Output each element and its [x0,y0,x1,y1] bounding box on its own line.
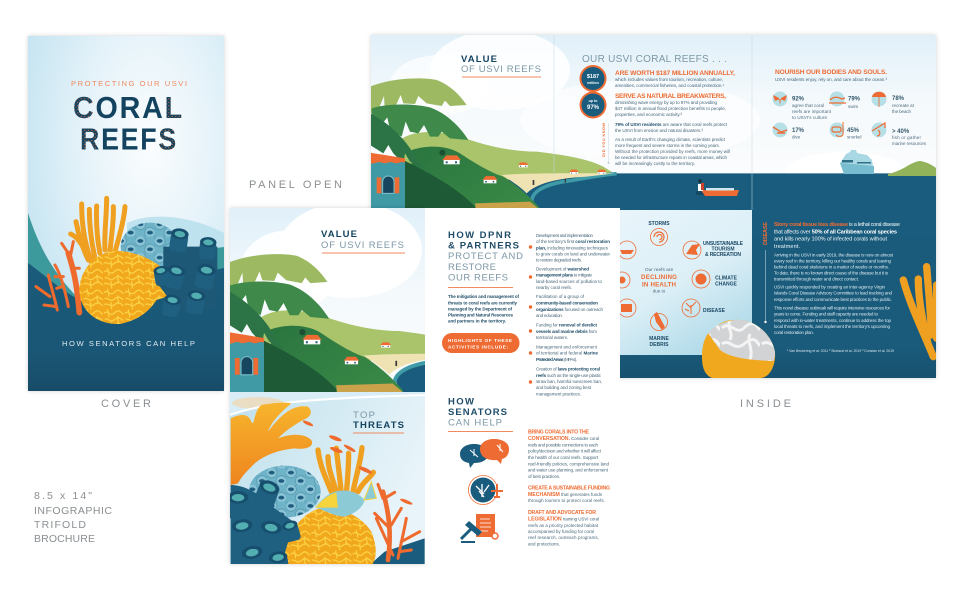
heading: top threats: THREATS [353,420,404,431]
text block: reef value facts: $47 million in annual flood protection benefits to people, [615,106,726,111]
stat: 45% snorkel [830,122,862,140]
center label: declining in health: due to [653,288,666,294]
label: panel open: PANEL OPEN [249,179,342,191]
text block: senator actions: CREATE A SUSTAINABLE FUNDING [528,486,610,492]
stat: 40% fish or gather: marine resources [892,141,927,146]
footnotes: ¹ Van Beukering et al. 2011 ² Storlazzi et al. 2019 ³ Constan et al. 2019 [787,349,894,353]
bullet list: protection activities: vessels and marine debris from [536,329,597,334]
text block: stony coral tissue loss disease: USVI quickly responded by creating an inter-agency Virgin [774,284,885,290]
text block: stony coral tissue loss disease: To date, there is no known direct cause of the disease but it is [774,270,889,276]
text: how senators can help: HOW SENATORS CAN HELP [62,339,195,348]
center label: declining in health [641,267,677,294]
stat: 78% beach [872,92,915,114]
text block: stony coral tissue loss disease: coral restoration plan. [774,330,814,335]
bullet list: protection activities: straw ban, harmful sunscreen ban, [536,379,602,384]
stat: 78% beach: 78% [892,96,905,102]
heading: how senators can help: HOW [448,396,474,408]
stat: 17% dive: 17% [792,128,805,134]
text block: reef value facts: be needed for infrastructure repairs in coastal areas, which [615,155,727,160]
illustration: cruise ship [840,150,874,174]
text block: reef value facts: will be increasingly costly to the territory. [615,161,695,166]
bullet list: protection activities: Management and enforcement [536,344,598,350]
text block: mitigation intro [448,294,520,324]
label: cover: COVER [101,398,151,410]
panel: top threats [228,392,425,578]
text block: senator actions: BRING CORALS INTO THE [528,430,590,436]
threat: unsustainable tourism and recreation: & RECREATION [705,252,741,258]
stat: 79% swim: 79% [848,96,861,102]
threat: climate change [692,270,738,288]
text block: stony coral tissue loss disease: local threats to reefs, and implement the territory's upcoming [774,324,890,329]
text block: stony coral tissue loss disease: Arriving in the USVI in early 2019, the disease is now on almost [774,252,894,258]
text block: mitigation intro: and partners in the territory. [448,318,506,324]
text block: senator actions: MECHANISM that generates funds [528,492,603,498]
text block: stony coral tissue loss disease: behind dead coral skeletons in a matter of weeks or months. [774,264,889,270]
text block: reef value facts: SERVE AS NATURAL BREAKWATERS, [615,93,726,100]
threat: unsustainable tourism and recreation: TOURISM [712,246,734,252]
text block: mitigation intro: Planning and Natural Resources [448,312,513,318]
text block: senator actions: through tourism to protect coral reefs. [528,498,605,503]
illustration: boat with fisher [696,179,739,196]
sidebar label: did you know: DID YOU KNOW [602,123,606,157]
center label: declining in health: DECLINING [641,274,677,281]
infographic: threats declining in health [614,221,744,348]
stat badge: $187 million: $187 [587,74,599,80]
heading: nourish our bodies and souls: USVI residents enjoy, rely on, and care about the ocean.³ [775,77,888,82]
bullet list: protection activities: Development of watershed [536,266,589,272]
threat: disease: DISEASE [703,308,726,314]
heading: value of USVI reefs: OF USVI REEFS [321,240,404,251]
text block: senator actions: reef research, outreach programs, [528,535,599,540]
heading: how DPNR and partners protect: OUR REEFS [448,272,508,284]
text block: stony coral tissue loss disease: every reef in the territory, killing our healthy corals and leaving [774,258,891,264]
label: brochure format: INFOGRAPHIC [34,505,112,517]
text block: reef value facts: the USVI from erosion and natural disasters.³ [615,128,704,133]
text block: senator actions: reef-friendly policies, comprehensive land [528,462,609,466]
text block: reef value facts [615,70,735,166]
heading: top threats [353,410,404,434]
text block: senator actions: accompanied by funding for coral [528,529,594,534]
button: highlights of these activities [442,333,520,353]
stat: 78% beach: recreate at [892,103,915,108]
threat: unsustainable tourism and recreation [683,241,744,259]
stat: 92% culture: agree that coral [792,103,824,108]
text block: stony coral tissue loss disease: response efforts and communicate best practices to the public. [774,297,892,302]
text block: reef value facts: As a result of Earth's changing climate, scientists predict [615,137,726,142]
heading: our USVI coral reefs: OUR USVI CORAL REEFS . . . [582,54,727,65]
bullet list: protection activities: nearby coral reefs. [536,285,572,290]
text block: stony coral tissue loss disease: and kills nearly 100% of infected corals without [774,236,887,242]
stat: 79% swim: swim [848,104,858,109]
stat: 78% beach: the beach [892,109,911,114]
bullet list: protection activities: organizations focused on outreach [536,307,603,312]
text block: stony coral tissue loss disease: Stony coral tissue loss disease is a lethal coral disease [774,222,900,228]
stat badge: up to 97%: 97% [587,105,600,111]
stat: 17% dive [772,122,805,140]
illustration: distant island [888,161,936,176]
title: coral reefs: REEFS [80,122,178,156]
text block: senator actions: of best practices. [528,474,560,479]
text block: mitigation intro: The mitigation and management of [448,294,520,299]
heading: nourish our bodies and souls: NOURISH OUR BODIES AND SOULS. [775,69,887,76]
button: highlights of these activities: ACTIVITIES INCLUDE: [448,344,508,350]
bullet list: protection activities: to grow corals on land and underwater [536,252,610,256]
text block: senator actions: reefs as a priority protected habitat [528,523,599,528]
text block: reef value facts: 79% of USVI residents are aware that coral reefs protect [615,122,728,127]
stat: 40% fish or gather: > 40% [892,129,910,135]
threat: climate change: CHANGE [715,282,737,288]
bullet list: protection activities: reefs such as the single-use plastic [536,373,602,378]
bullet list: protection activities: Funding for removal of derelict [536,322,598,328]
label: brochure format [34,490,112,545]
text block: senator actions: and water use planning, and enforcement [528,468,609,472]
title: coral reefs: CORAL [73,90,184,125]
icon: gavel and legislation document [461,514,498,543]
bullet list: protection activities: management plans to mitigate [536,272,592,278]
stat: 45% snorkel: snorkel [847,134,862,140]
bullet list: protection activities: Protected Areas (MPAs). [536,357,577,362]
threat: overfishing icon [618,241,636,259]
heading: how senators can help: CAN HELP [448,418,502,428]
heading: how DPNR and partners protect [448,230,523,288]
text block: senator actions: policy/decision and whether it will affect [528,448,602,454]
inside heading: value of USVI reefs [461,54,541,78]
sidebar label: did you know [602,123,610,164]
heading: how senators can help: SENATORS [448,407,507,418]
text block: reef value facts: which includes values from tourism, recreation, culture, [615,77,723,82]
panel: value of USVI reefs [228,206,426,566]
label: brochure format: BROCHURE [34,533,95,545]
heading: top threats: TOP [353,410,375,421]
bullet list: protection activities: Facilitation of a group of [536,294,585,299]
button: highlights of these activities: HIGHLIGHTS OF THESE [448,338,512,343]
threat: climate change: CLIMATE [715,276,738,282]
heading: how senators can help [448,396,513,432]
center label: declining in health: Our reefs are [645,267,673,273]
stat: 92% culture: to USVI's culture [792,115,827,120]
sidebar label: disease: DISEASE [763,222,769,245]
text block: senator actions: LEGISLATION naming USVI coral [528,516,599,522]
text block: stony coral tissue loss disease: Islands Coral Disease Advisory Committee to lead tracking and [774,290,892,296]
text block: reef value facts: Without the protection provided by reefs, more money will [615,149,730,154]
stat: 92% culture: reefs are important [792,109,832,114]
stat badge: $187 million [580,66,606,91]
bullet list: protection activities: Creation of laws protecting coral [536,366,600,372]
threat: sediment icon [614,272,630,288]
inside heading: value of USVI reefs: OF USVI REEFS [461,64,541,75]
stat: 92% culture [772,92,832,120]
heading: value of USVI reefs: VALUE [321,229,357,240]
text block: stony coral tissue loss disease [774,222,900,335]
text block: reef value facts: amenities, commercial fisheries, and coastal protection.¹ [615,83,724,88]
stat badge: $187 million: million [587,81,599,85]
label: inside: INSIDE [740,398,791,410]
bullet list: protection activities: land-based sources of pollution to [536,279,602,284]
stat: 92% culture: 92% [792,96,805,102]
threat: storms: STORMS [648,221,670,227]
panel: cover [28,36,224,391]
center label: declining in health: IN HEALTH [642,282,677,288]
icon: speech bubbles [460,439,509,468]
threat: marine debris: MARINE [649,336,670,342]
bullet list: protection activities: of the territory's first coral restoration [536,239,610,244]
icon: coral coin with plane [468,476,503,504]
stat: 79% swim [829,92,861,109]
text: protecting our USVI: PROTECTING OUR USVI [71,79,187,88]
text block: mitigation intro: threats to coral reefs are currently [448,300,517,306]
text block: senator actions: and protections. [528,542,560,546]
text block: stony coral tissue loss disease: years to come. Funding and staff capacity are needed to [774,312,878,316]
text block: mitigation intro: managed by the Department of [448,306,512,312]
heading: value of USVI reefs [321,229,405,254]
text block: stony coral tissue loss disease: transmitted through water and direct contact. [774,276,859,282]
illustration: orange finger coral [903,267,937,357]
stat badge: up to 97%: up to [589,99,598,103]
bullet list: protection activities: plan, including innovating techniques [536,246,609,250]
bullet list: protection activities: territorial waters. [536,335,568,340]
threat: pollution icon [618,299,636,317]
bullet list: protection activities: of territorial and federal Marine [536,350,598,356]
heading: how DPNR and partners protect: HOW DPNR [448,230,511,241]
text block: senator actions [528,430,610,546]
bullet list: protection activities: management practices. [536,392,581,396]
illustration: bleached brain coral [702,320,775,378]
text block: stony coral tissue loss disease: This novel disease outbreak will require intensive resources for [774,306,890,310]
threat: marine debris [649,312,670,348]
heading: nourish our bodies and souls [775,69,888,82]
threat: unsustainable tourism and recreation: UNSUSTAINABLE [703,241,744,247]
sidebar label: disease [763,222,769,323]
text block: reef value facts: diminishing wave energy by up to 97% and providing [615,100,717,105]
bullet list: protection activities: to restore degraded reefs. [536,258,582,262]
text block: reef value facts: ARE WORTH $187 MILLION ANNUALLY, [615,70,735,77]
text block: senator actions: CONVERSATION. Consider coral [528,436,599,442]
panel: inside spread [370,30,980,378]
panel: how DPNR and partners [425,208,620,564]
bullet list: protection activities: and education. [536,313,563,318]
stat badge: up to 97% [580,92,606,118]
text block: senator actions: reefs and possible connections to each [528,442,598,448]
label: brochure format: 8.5 x 14" [34,490,92,502]
text block: reef value facts: more frequent and severe storms in the coming years. [615,143,720,148]
threat: marine debris: DEBRIS [650,342,669,348]
stat: 40% fish or gather [872,122,927,146]
stat: 17% dive: dive [792,134,801,140]
text block: senator actions: DRAFT AND ADVOCATE FOR [528,510,596,516]
bullet list: protection activities: community-based conservation [536,300,598,306]
text block: stony coral tissue loss disease: respond with in-water treatments, continue to address the top [774,318,891,323]
bullet list: protection activities: and building and zoning best [536,385,592,390]
text block: stony coral tissue loss disease: treatment. [774,244,800,250]
text block: senator actions: the health of our coral reefs. Support [528,455,599,460]
text block: stony coral tissue loss disease: that affects over 50% of all Caribbean coral species [774,230,897,236]
stat: 40% fish or gather: fish or gather [892,135,922,140]
inside heading: value of USVI reefs: VALUE [461,54,497,65]
heading: how DPNR and partners protect: RESTORE [448,262,496,273]
text block: reef value facts: properties, and economic activity.² [615,112,682,117]
bullet list: protection activities [529,233,610,396]
bullet list: protection activities: Development and implementation [536,233,593,238]
stat: 45% snorkel: 45% [847,128,860,134]
title: coral reefs [73,90,184,156]
heading: how DPNR and partners protect: & PARTNERS [448,240,519,252]
heading: how DPNR and partners protect: PROTECT AND [448,251,523,262]
label: brochure format: TRIFOLD [34,519,86,531]
